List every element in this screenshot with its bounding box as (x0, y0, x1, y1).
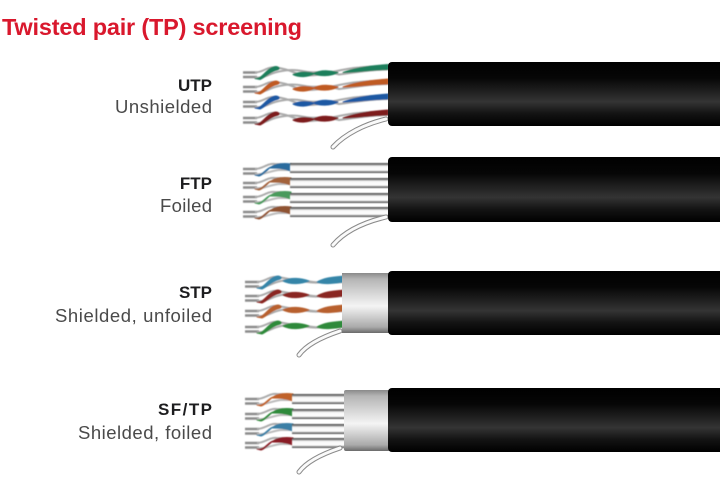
label: UTP: Unshielded (115, 96, 212, 117)
twisted wire pairs (243, 163, 291, 219)
panel: SF/TP cable (78, 388, 720, 472)
label: FTP: FTP (180, 174, 212, 193)
label: FTP (160, 174, 212, 216)
title: Twisted pair (TP) screening (2, 14, 302, 40)
label: UTP: UTP (178, 76, 212, 95)
twisted wire pairs (245, 276, 344, 334)
label: FTP: Foiled (160, 195, 212, 216)
black jacket (388, 271, 720, 335)
drain wire (333, 119, 386, 147)
label: STP: Shielded, unfoiled (55, 305, 212, 326)
black jacket (388, 157, 720, 222)
drain wire (333, 217, 386, 245)
panel: STP cable (55, 271, 720, 355)
foil wrapped pairs (290, 163, 390, 217)
label: STP (55, 283, 212, 326)
label: SF/TP (78, 400, 212, 443)
label: UTP (115, 76, 212, 117)
black jacket (388, 62, 720, 126)
twisted wire pairs (245, 393, 293, 450)
label: SF/TP: Shielded, foiled (78, 422, 212, 443)
drain wire (299, 448, 340, 472)
braided shield (342, 273, 390, 333)
panel: UTP cable (115, 62, 720, 147)
foil wrapped pairs (292, 394, 346, 448)
label: SF/TP: SF/TP (158, 400, 212, 419)
drain wire (299, 331, 340, 355)
panel: FTP cable (160, 157, 720, 245)
black jacket (388, 388, 720, 452)
label: STP: STP (179, 283, 212, 302)
twisted wire pairs (243, 64, 388, 125)
braided shield (344, 390, 390, 451)
